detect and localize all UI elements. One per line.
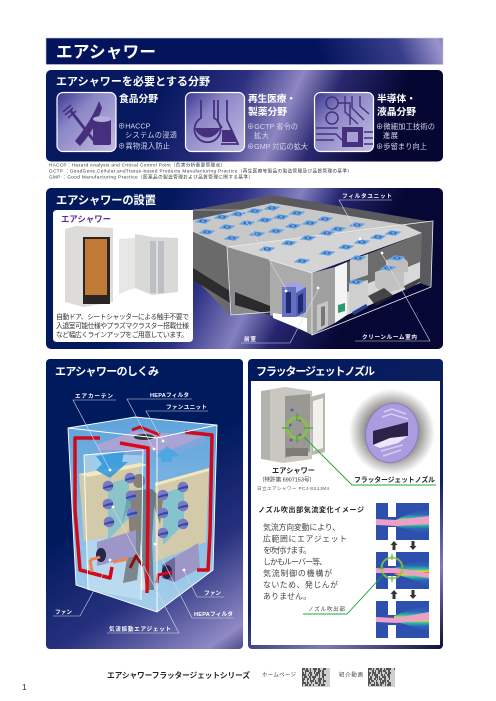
text: semiconductor field	[376, 92, 435, 151]
text: regenerative medicine field: 製薬分野	[248, 105, 287, 118]
QR code: homepage	[302, 668, 330, 687]
text: semiconductor field: 進展	[383, 131, 398, 140]
panel: installation	[46, 188, 443, 349]
text: semiconductor field: ⊕微細加工技術の	[376, 122, 435, 131]
heading: fields: エアシャワーを必要とする分野	[56, 74, 210, 88]
air shower cutaway diagram	[68, 417, 217, 612]
callout: anteroom	[241, 287, 319, 343]
text: food field: ⊕HACCP	[118, 122, 151, 130]
nozzle description: 広範囲にエアジェット	[263, 534, 347, 544]
callout: filter unit: フィルタユニット	[342, 192, 392, 200]
label: air shower patent	[257, 466, 329, 492]
person silhouette	[122, 474, 163, 590]
icon: green target on nozzle	[282, 413, 436, 485]
footer: homepage label: ホームページ	[262, 672, 297, 678]
callout: fan right	[183, 569, 224, 597]
clean room equipment	[338, 254, 420, 315]
fans	[96, 530, 200, 582]
callout: nozzle outlet	[303, 554, 406, 614]
air shower unit in building	[282, 281, 306, 317]
panel: fields requiring air showers	[46, 70, 443, 162]
white content area	[251, 381, 440, 645]
product description: など幅広くラインアップをご用意しています。	[56, 330, 188, 339]
nozzle description	[263, 522, 347, 601]
heading: installation: エアシャワーの設置	[56, 194, 156, 207]
callout: clean room interior	[355, 252, 430, 341]
glass box edges	[68, 417, 217, 612]
abbreviations note: HACCP：Hazard Analysis and Critical Control Point（危害分析重要管理点）	[49, 162, 225, 168]
title bar	[46, 38, 443, 64]
footer: video label: 紹介動画	[339, 670, 364, 678]
product description	[56, 312, 189, 339]
airflow simulation middle	[376, 552, 429, 589]
nozzle description: しかもルーバー等、	[263, 556, 327, 566]
label: air shower patent: エアシャワー	[272, 466, 315, 475]
nozzle description: 気流制御の機構が	[263, 568, 332, 578]
red air ducts	[75, 427, 212, 593]
photo: orange door air shower	[65, 226, 113, 307]
callout: HEPA filter top: HEPAフィルタ	[150, 391, 189, 399]
text: regenerative medicine field: 再生医療・	[248, 92, 296, 105]
white box: air shower product	[53, 210, 193, 342]
text: food field: システムの浸透	[125, 130, 177, 140]
product description: 自動ドア、シートシャッターによる触手不要で	[56, 312, 189, 321]
callout: fan unit: ファンユニット	[166, 404, 207, 411]
text: food field	[118, 92, 177, 150]
text: food field: 食品分野	[119, 92, 158, 105]
heading: mechanism: エアシャワーのしくみ	[55, 365, 159, 378]
label: nozzle: フラッタージェットノズル	[354, 475, 435, 484]
label: air shower patent: （特許第 6907153号）	[259, 476, 315, 484]
panel: flutter jet nozzle	[248, 359, 443, 649]
callout: air curtain	[73, 393, 116, 471]
photo: shutter air shower	[119, 234, 178, 295]
nozzle description: を吹付けます。	[263, 545, 311, 555]
callout: fan right: ファン	[204, 590, 221, 597]
beige panels	[79, 463, 209, 562]
callout: fan left	[53, 559, 111, 616]
abbreviations note: GCTP ：GoodGene,Cellular,andTissue-based Products Manufacturing Practice（再生医療等製品の製造管理及び品質管理の基準）	[49, 168, 352, 174]
text: regenerative medicine field	[247, 92, 308, 151]
arrows between simulations	[390, 541, 416, 599]
callout: HEPA filter top	[127, 391, 192, 450]
abbreviations note	[49, 162, 352, 180]
nozzle description: 気流方向変動により、	[263, 522, 340, 532]
title bar: エアシャワー	[56, 42, 156, 62]
QR code: video	[368, 668, 395, 687]
text: regenerative medicine field: ⊕GMP 対応の拡大	[247, 142, 308, 151]
text: food field: ⊕異物混入防止	[118, 142, 170, 150]
footer: series name: エアシャワーフラッタージェットシリーズ	[107, 670, 250, 680]
top fan unit	[96, 431, 207, 456]
nozzle description: ないため、発じんが	[263, 580, 338, 590]
callout: fan unit	[146, 404, 208, 442]
callout: flutter air jet	[107, 506, 179, 633]
clean room building cutaway	[193, 195, 433, 335]
callout: HEPA filter bottom: HEPAフィルタ	[194, 610, 233, 618]
airflow simulation bottom	[376, 601, 429, 638]
air jet nozzles	[103, 473, 188, 538]
text: regenerative medicine field: ⊕GCTP 省令の	[247, 122, 298, 131]
product description: 入退室可能仕様やプラズマクラスター搭載仕様	[56, 321, 189, 330]
label: air shower: エアシャワー	[61, 214, 111, 224]
icon: flasks	[186, 92, 244, 152]
heading: nozzle: フラッタージェットノズル	[256, 364, 375, 378]
airflow simulation top	[376, 503, 429, 540]
callout: filter unit	[339, 192, 392, 240]
photo: open air shower	[261, 387, 325, 463]
ceiling filter units	[194, 205, 402, 264]
label: air shower patent: 日立エアシャワー PCJ-8SJJM4	[257, 485, 329, 492]
page number: 1	[22, 682, 27, 692]
callout: nozzle outlet: ノズル吹出部	[308, 605, 345, 613]
blue air flow	[96, 446, 184, 590]
callout: air curtain: エアカーテン	[75, 393, 113, 400]
icon: food	[57, 92, 116, 152]
callout: clean room interior: クリーンルーム室内	[362, 333, 417, 341]
callout: HEPA filter bottom	[154, 543, 234, 618]
callout: air shower leader	[193, 210, 287, 292]
icon: semiconductor circuit	[314, 92, 374, 152]
sub-heading: nozzle airflow image: ノズル吹出部気流変化イメージ	[258, 505, 364, 514]
photo: nozzle close-up	[349, 389, 435, 475]
callout: flutter air jet: 気流振動エアジェット	[109, 625, 171, 633]
text: semiconductor field: 半導体・	[377, 92, 416, 105]
text: regenerative medicine field: 拡大	[254, 131, 269, 140]
text: semiconductor field: 液晶分野	[377, 105, 416, 118]
nozzle description: ありません。	[263, 592, 311, 601]
text: semiconductor field: ⊕歩留まり向上	[376, 142, 427, 151]
abbreviations note: GMP ：Good Manufacturing Practice（医薬品の製造管理および品質管理に関する基準）	[49, 174, 253, 180]
callout: anteroom: 前室	[244, 335, 256, 343]
callout: fan left: ファン	[55, 609, 72, 616]
panel: mechanism	[46, 359, 243, 649]
